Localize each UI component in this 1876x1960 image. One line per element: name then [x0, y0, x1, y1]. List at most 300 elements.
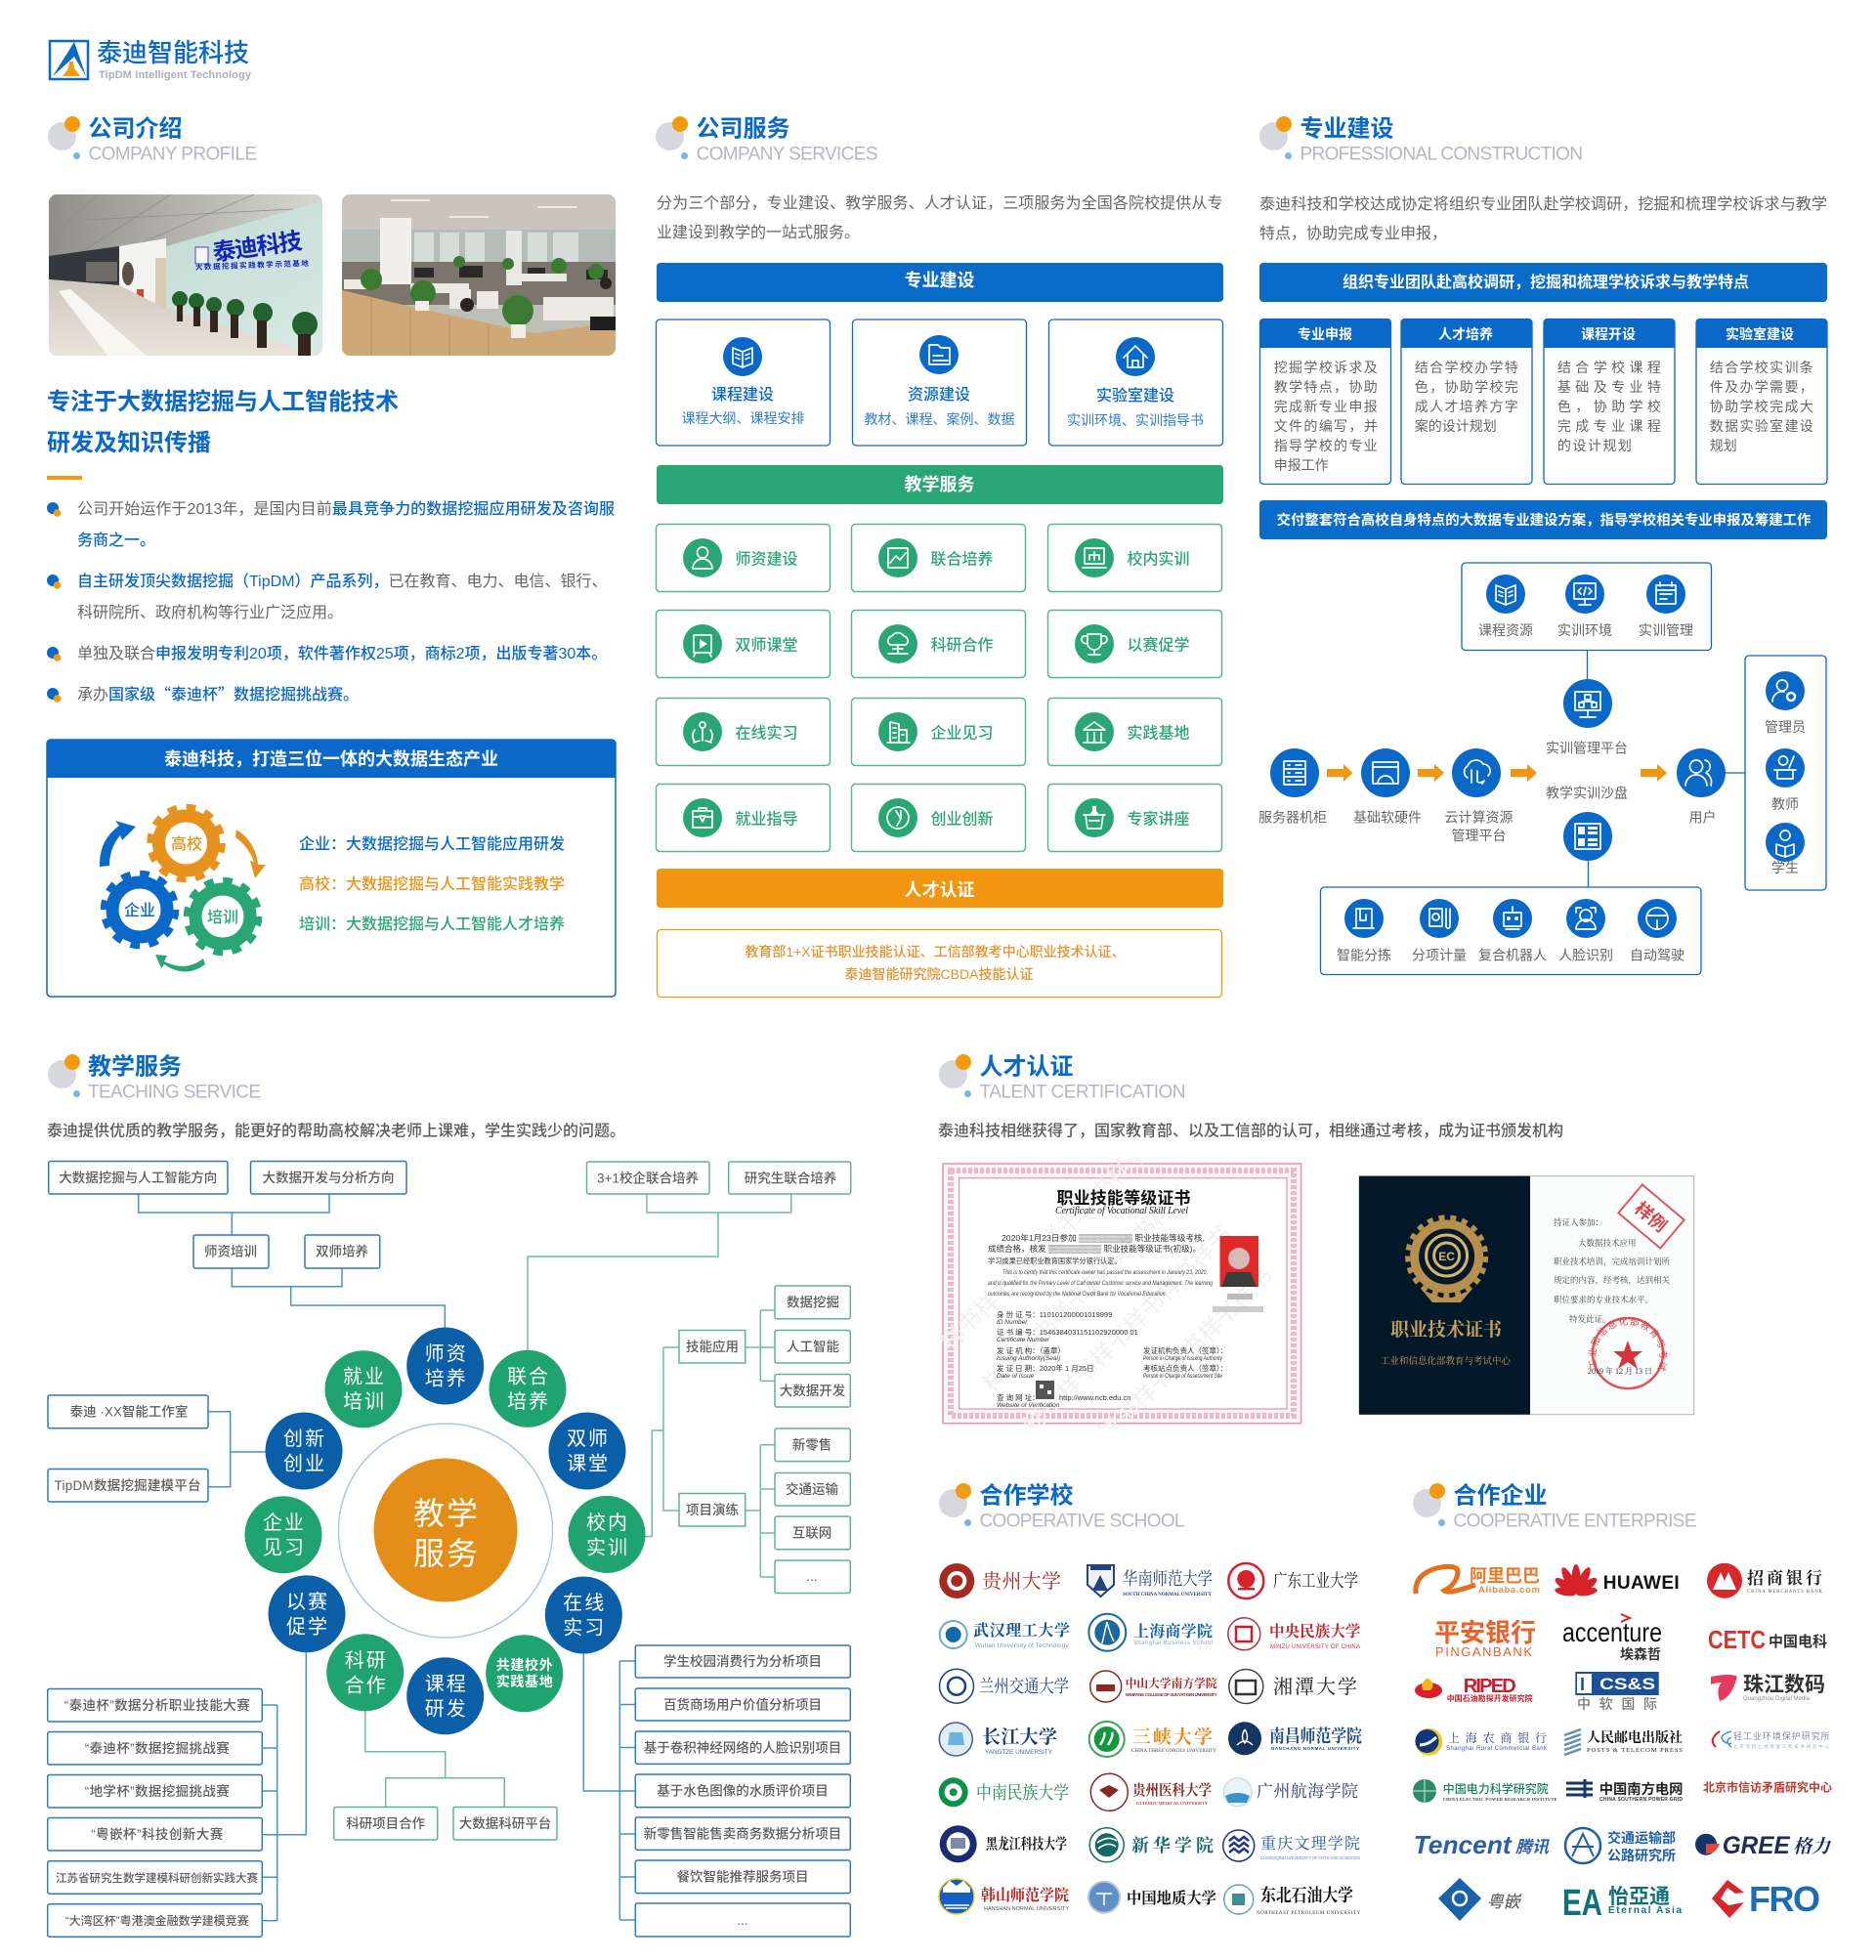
logo: Beijing Petition Research Center: 北京市信访矛盾研究中心	[1703, 1780, 1832, 1794]
card: resource construction: 教材、课程、案例、数据	[864, 411, 1014, 427]
boxes: internship projects: 新零售智能售卖商务数据分析项目	[644, 1825, 841, 1841]
logo: Chongqing University of Arts and Sciences	[1223, 1830, 1360, 1861]
boxes: project practice: 交通运输	[786, 1481, 838, 1497]
boxes: skill application	[679, 1286, 850, 1407]
boxes: innovation platforms: TipDM数据挖掘建模平台	[55, 1477, 201, 1493]
panel: company services	[656, 116, 1223, 998]
box: talent training	[1401, 319, 1532, 485]
certificate: vocational skill: ID Number	[997, 1319, 1028, 1326]
logo: China Merchants Bank	[1707, 1563, 1823, 1598]
logo: Guizhou Medical University: GUIZHOU MEDICAL UNIVERSITY	[1136, 1801, 1209, 1806]
logo: Shanghai Rural Commercial Bank: 上海农商银行	[1448, 1730, 1547, 1745]
logo: Nanfang College of Sun Yat-sen University: 中山大学南方学院	[1126, 1676, 1217, 1690]
gear: university	[150, 807, 222, 879]
logo: Xiangtan University	[1229, 1669, 1357, 1704]
node: course development: 课程	[425, 1673, 466, 1695]
node: teacher training	[406, 1327, 484, 1405]
node: dual teacher classroom: 课堂	[567, 1452, 608, 1475]
hub: teaching service: 教学	[413, 1496, 478, 1531]
logo: Minzu University of China	[1228, 1618, 1360, 1650]
logo: Shanghai Rural Commercial Bank	[1415, 1728, 1548, 1756]
logo: China Electric Power Research Institute	[1413, 1779, 1557, 1803]
box: course offering: 色，协助学校	[1557, 399, 1661, 414]
logo: FRO	[1712, 1879, 1820, 1919]
logo: Highway Research Institute: 公路研究所	[1607, 1848, 1676, 1863]
boxes: joint training: 研究生联合培养	[745, 1171, 837, 1186]
stamp: seal: 2019 年 12 月 13 日	[1588, 1366, 1652, 1376]
logo: China Southern Power Grid	[1566, 1779, 1683, 1803]
boxes: project practice: 新零售	[792, 1436, 831, 1452]
box: applications: 人脸识别	[1558, 947, 1613, 962]
heading: cooperative enterprise	[1413, 1483, 1696, 1532]
icon: users	[1677, 748, 1726, 797]
box: laboratory construction: 件及办学需要，	[1710, 379, 1813, 395]
node: innovation: 创业	[283, 1452, 324, 1475]
box: laboratory construction: 规划	[1710, 438, 1737, 453]
card: laboratory construction: 实验室建设	[1096, 386, 1174, 405]
box: talent training: 案的设计规划	[1415, 418, 1497, 434]
gear: university: 高校	[171, 834, 202, 853]
node: teacher training: 培养	[425, 1368, 466, 1389]
logo: Accenture: accenture	[1562, 1617, 1662, 1647]
logo: China Merchants Bank: 招商银行	[1747, 1568, 1822, 1588]
certificate: technical certificate: 职位要求的专业技术水平。	[1554, 1295, 1653, 1304]
heading: talent certification: 人才认证	[979, 1054, 1073, 1081]
node: competition	[268, 1575, 346, 1652]
heading: cooperative enterprise: COOPERATIVE ENTERPRISE	[1454, 1511, 1696, 1532]
connectors	[139, 1194, 791, 1921]
service: joint training: 联合培养	[930, 551, 994, 569]
certificate: vocational skill: Date of Issue	[997, 1373, 1035, 1380]
legend text: 高校：大数据挖掘与人工智能实践教学	[299, 874, 565, 893]
boxes: internship projects: 基于水色图像的水质评价项目	[657, 1782, 829, 1798]
logo: Guangzhou Digital Media: 珠江数码	[1743, 1674, 1825, 1696]
logo: Gree	[1695, 1832, 1832, 1859]
boxes: competitions: “地学杯”数据挖掘挑战赛	[85, 1783, 230, 1799]
photo: reception corridor: 泰迪科技	[211, 228, 304, 267]
bar: talent certification	[657, 869, 1223, 908]
label: basic hardware and software: 基础软硬件	[1353, 810, 1422, 826]
service: online internship	[657, 698, 831, 766]
logo: Shanghai Rural Commercial Bank: Shanghai Rural Commercial Bank	[1446, 1746, 1548, 1752]
service: enterprise visit: 企业见习	[930, 723, 994, 743]
heading: company services: COMPANY SERVICES	[696, 145, 877, 164]
logo: Ping An Bank: PINGANBANK	[1435, 1644, 1532, 1659]
boxes: internship projects: ...	[737, 1913, 748, 1928]
logo: Eternal Asia	[1562, 1883, 1682, 1924]
logo: Nanchang Normal University: NANCHANG NORMAL UNIVERSITY	[1271, 1746, 1359, 1751]
box: course offering: 结合学校课程	[1557, 360, 1661, 375]
boxes: research: 大数据科研平台	[459, 1815, 551, 1831]
panel: cooperative enterprises	[1413, 1483, 1832, 1924]
box: user roles: 教师	[1771, 796, 1799, 812]
logo: Wuhan University of Technology: 武汉理工大学	[973, 1622, 1070, 1640]
heading: company services	[656, 116, 877, 164]
panel: three in one ecosystem: 泰迪科技，打造三位一体的大数据生态产业	[164, 748, 498, 769]
bar: deliver plan: 交付整套符合高校自身特点的大数据专业建设方案，指导学校相关专业申报及筹建工作	[1277, 511, 1811, 529]
label: server cabinet: 服务器机柜	[1258, 810, 1327, 826]
node: competition: 以赛	[286, 1591, 327, 1613]
heading: teaching service	[48, 1054, 261, 1102]
logo: South-Central Minzu University	[939, 1777, 1069, 1807]
logo: Guizhou Medical University	[1090, 1773, 1212, 1811]
certificate: vocational skill: Certificate of Vocational Skill Level	[1055, 1206, 1188, 1216]
bar: organize team: 组织专业团队赴高校调研，挖掘和梳理学校诉求与教学特点	[1343, 273, 1749, 291]
certificate: vocational skill: and is qualified for the Primary Level of Call center Customer service and Management. The learning	[988, 1280, 1213, 1287]
logo: Nanchang Normal University: 南昌师范学院	[1269, 1726, 1362, 1746]
logo: Guangzhou Digital Media: Guangzhou Digital Media	[1743, 1696, 1811, 1702]
service: dual teacher classroom	[657, 610, 831, 678]
card: course construction: 课程建设	[711, 386, 774, 404]
service: online internship: 在线实习	[735, 723, 798, 743]
logo: China Electric Power Research Institute: CHINA ELECTRIC POWER RESEARCH INSTITUTE	[1443, 1797, 1557, 1802]
certification box: 教育部1+X证书职业技能认证、工信部教考中心职业技术认证、	[745, 944, 1126, 959]
tagline: 专注于大数据挖掘与人工智能技术	[47, 389, 399, 415]
logo: Alibaba: 阿里巴巴	[1470, 1566, 1540, 1586]
card: resource construction: 资源建设	[908, 386, 970, 404]
heading: company profile: COMPANY PROFILE	[88, 145, 257, 164]
box: talent training: 结合学校办学特	[1415, 360, 1518, 375]
boxes: innovation platforms: 泰迪 ·XX智能工作室	[70, 1403, 188, 1419]
node: off-campus base: 共建校外	[496, 1657, 553, 1673]
arrow	[1418, 764, 1444, 782]
logo: Tencent: 腾讯	[1515, 1838, 1550, 1856]
node: enterprise visit: 见习	[263, 1538, 304, 1559]
emblem: gold gear	[1408, 1217, 1486, 1302]
logo: Northeast Petroleum University: 东北石油大学	[1260, 1886, 1353, 1905]
service: employment guidance: 就业指导	[735, 811, 798, 829]
node: online internship: 实习	[563, 1616, 604, 1640]
bullet list: 承办国家级“泰迪杯”数据挖掘挑战赛。	[77, 681, 359, 704]
logo: RIPED: RIPED	[1464, 1676, 1516, 1697]
logo: Light Industry Environmental Protection Institute: 北京北科土地修复工程技术研究中心	[1733, 1743, 1829, 1750]
logo: Guangzhou Digital Media	[1711, 1674, 1825, 1702]
node: dual teacher classroom: 双师	[567, 1427, 608, 1450]
certification box: 泰迪智能研究院CBDA技能认证	[845, 966, 1033, 982]
panel: company profile	[47, 116, 616, 997]
service: campus practical training	[1047, 524, 1221, 592]
box: applications: 智能分拣	[1337, 947, 1391, 962]
logo: South China Normal University: SOUTH CHINA NORMAL UNIVERSITY	[1123, 1593, 1212, 1598]
logo: Chinasoft International	[1575, 1672, 1659, 1712]
logo: Yangtze University: YANGTZE UNIVERSITY	[985, 1749, 1053, 1756]
boxes: internship projects: 餐饮智能推荐服务项目	[676, 1868, 809, 1884]
certificate: vocational skill: 样书样书样书样书样书样书	[1019, 1221, 1237, 1439]
logo: Eternal Asia: EA	[1562, 1883, 1602, 1924]
certificate: technical certificate	[1358, 1175, 1694, 1415]
certificate: vocational skill: Issuing Authority(Seal)	[997, 1355, 1060, 1362]
node: joint training: 联合	[507, 1365, 548, 1387]
photo: reception corridor	[49, 194, 322, 356]
bar: organize team	[1259, 263, 1827, 302]
certificate: technical certificate: 特发此证。	[1569, 1314, 1611, 1324]
logo: Posts and Telecom Press: 人民邮电出版社	[1587, 1729, 1683, 1746]
service: learning through competition: 以赛促学	[1128, 635, 1190, 655]
logo: Huawei: HUAWEI	[1603, 1573, 1680, 1594]
node: employment training	[324, 1350, 403, 1427]
gear: enterprise: 企业	[124, 901, 155, 919]
logo: FRO: FRO	[1749, 1879, 1820, 1919]
card: laboratory construction: 实训环境、实训指导书	[1067, 412, 1204, 428]
service: dual teacher classroom: 双师课堂	[735, 637, 798, 655]
logo: RIPED: 中国石油勘探开发研究院	[1447, 1693, 1533, 1703]
card: laboratory construction	[1049, 320, 1223, 446]
logo: Guizhou Medical University: 贵州医科大学	[1132, 1781, 1212, 1799]
boxes: internship projects: 百货商场用户价值分析项目	[663, 1696, 822, 1712]
node: enterprise visit: 企业	[263, 1512, 304, 1534]
tagline: 研发及知识传播	[47, 430, 211, 456]
icon: teaching sandbox	[1563, 812, 1612, 861]
certificate: vocational skill: 2020年1月23日参加 ▒▒▒▒▒▒▒▒▒ 职业技能等级考核,	[1002, 1233, 1205, 1243]
box: applications: 复合机器人	[1478, 947, 1547, 962]
gear: training	[188, 881, 258, 952]
logo: China Three Gorges University: CHINA THREE GORGES UNIVERSITY	[1131, 1749, 1216, 1754]
stamp: sample	[1618, 1184, 1684, 1249]
hub ring	[338, 1424, 553, 1638]
logo: China Three Gorges University: 三峡大学	[1132, 1726, 1213, 1748]
service: teacher building	[657, 524, 831, 592]
box: user roles: 管理员	[1765, 719, 1806, 735]
logo: Chongqing University of Arts and Sciences: 重庆文理学院	[1260, 1835, 1360, 1853]
logo: Yangtze University	[939, 1723, 1057, 1756]
certificate: vocational skill: Person in Charge of Issuing Authority	[1143, 1355, 1223, 1362]
logo: CETC: CETC	[1708, 1625, 1766, 1654]
certificate: vocational skill: 样书样书样书样书样书样书	[936, 1138, 1154, 1356]
node: enterprise visit	[244, 1496, 322, 1573]
certificate: technical certificate: 大数据技术应用	[1578, 1238, 1637, 1248]
node: research	[326, 1634, 404, 1711]
heading: company profile	[48, 116, 257, 164]
logo: Alibaba: Alibaba.com	[1478, 1585, 1540, 1596]
boxes: skill application: 技能应用	[686, 1339, 739, 1354]
boxes: project practice	[679, 1428, 850, 1593]
boxes: joint training	[586, 1162, 851, 1194]
boxes: joint training: 3+1校企联合培养	[597, 1171, 699, 1186]
heading: professional construction	[1259, 116, 1583, 164]
logo: Nanfang College of Sun Yat-sen University	[1090, 1671, 1217, 1702]
box: training resources: 实训环境	[1557, 622, 1612, 638]
logo: Northeast Petroleum University	[1224, 1885, 1360, 1916]
box: laboratory construction: 结合学校实训条	[1710, 360, 1813, 375]
node: innovation: 创新	[283, 1427, 324, 1450]
boxes: skill application: 数据挖掘	[787, 1294, 839, 1309]
logo: Alibaba	[1416, 1566, 1540, 1596]
heading: teaching service: TEACHING SERVICE	[88, 1083, 261, 1102]
bullet list	[47, 499, 615, 704]
logo: Hanshan Normal University: HANSHAN NORMAL UNIVERSITY	[984, 1906, 1069, 1912]
logo: Shanghai Business School: 上海商学院	[1133, 1622, 1213, 1640]
certificate: vocational skill: http://www.ncb.edu.cn	[1059, 1393, 1130, 1402]
company logo and name: TipDM Intelligent Technology	[99, 69, 252, 81]
panel: professional construction	[1258, 116, 1827, 975]
boxes: competitions: “粤嵌杯”科技创新大赛	[91, 1826, 224, 1842]
node: off-campus base	[486, 1635, 563, 1712]
logo: Posts and Telecom Press	[1564, 1729, 1683, 1755]
card: course construction: 课程大纲、课程安排	[682, 410, 805, 426]
logo: CETC	[1708, 1625, 1827, 1654]
logo: Nanfang College of Sun Yat-sen University: NANFANG COLLEGE OF SUN YAT-SEN UNIVERSITY	[1126, 1692, 1217, 1697]
emblem: gold gear: EC	[1438, 1250, 1455, 1263]
box: laboratory construction: 数据实验室建设	[1710, 418, 1813, 434]
hub: teaching service: 服务	[413, 1536, 478, 1571]
logo: Huawei	[1553, 1564, 1680, 1598]
logo: Posts and Telecom Press: POSTS & TELECOM PRESS	[1587, 1747, 1683, 1754]
certificate: technical certificate: 职业技术证书	[1390, 1319, 1503, 1341]
arrow: green	[155, 955, 205, 971]
direction boxes top left: 大数据挖掘与人工智能方向	[59, 1170, 217, 1185]
certificate: vocational skill: 样书样书样书样书样书样书	[978, 1180, 1196, 1397]
certificate: vocational skill: 证 书 编 号：1546384031151102920000 01	[997, 1327, 1138, 1337]
certificate: vocational skill	[940, 1158, 1301, 1428]
card: course construction	[657, 320, 831, 446]
icon: basic hardware and software	[1361, 748, 1410, 797]
box: laboratory construction: 协助学校完成大	[1710, 399, 1813, 414]
box: training resources: 实训管理	[1639, 622, 1693, 638]
bullet list: 单独及联合申报发明专利20项，软件著作权25项，商标2项，出版专著30本。	[77, 645, 607, 662]
certificate: vocational skill: 发 证 机 构：（盖章）	[997, 1345, 1065, 1355]
gear: training: 培训	[207, 909, 238, 926]
service: expert lecture	[1047, 784, 1221, 852]
bar: teaching service	[657, 465, 1223, 504]
box: course offering: 基础及专业特	[1557, 379, 1661, 395]
logo: China Southern Power Grid: CHINA SOUTHERN POWER GRID	[1599, 1797, 1683, 1803]
boxes: competitions	[48, 1688, 262, 1937]
service: expert lecture: 专家讲座	[1128, 809, 1190, 829]
logo: RIPED	[1415, 1676, 1533, 1703]
box: laboratory construction	[1696, 319, 1827, 485]
node: employment training: 就业	[343, 1366, 384, 1388]
intro text	[1259, 195, 1827, 242]
logo: Northeast Petroleum University: NORTHEAST PETROLEUM UNIVERSITY	[1257, 1911, 1360, 1916]
heading: talent certification	[939, 1054, 1186, 1102]
bullet list: 科研院所、政府机构等行业广泛应用。	[77, 603, 343, 621]
intro text: 分为三个部分，专业建设、教学服务、人才认证，三项服务为全国各院校提供从专	[657, 194, 1223, 212]
box: laboratory construction: 实验室建设	[1726, 326, 1794, 342]
company logo and name: 泰迪智能科技	[97, 38, 249, 67]
logo: Xinhua College: 新华学院	[1131, 1836, 1214, 1855]
label: training platform: 实训管理平台	[1546, 741, 1628, 756]
certificate: vocational skill: Website of Verification	[997, 1402, 1060, 1409]
box: user roles	[1745, 656, 1826, 890]
arrow: blue	[100, 821, 136, 867]
certificate: vocational skill: Person in Charge of Assessment Site	[1143, 1373, 1222, 1380]
label: teaching sandbox: 教学实训沙盘	[1546, 786, 1628, 801]
bullet list: 公司开始运作于2013年，是国内目前最具竞争力的数据挖掘应用研发及咨询服	[77, 499, 615, 518]
panel: teaching service	[47, 1054, 851, 1937]
arrow	[1511, 764, 1537, 782]
panel: cooperative schools	[939, 1483, 1362, 1916]
direction boxes top left: 大数据开发与分析方向	[262, 1170, 395, 1185]
panel: three in one ecosystem	[47, 740, 616, 997]
boxes: project practice: ...	[806, 1569, 818, 1584]
node: teacher training: 师资	[425, 1342, 466, 1365]
boxes: project practice: 互联网	[792, 1526, 831, 1540]
direction boxes top left	[49, 1161, 406, 1268]
logo: South China Normal University: 华南师范大学	[1123, 1568, 1213, 1589]
node: dual teacher classroom	[549, 1413, 625, 1489]
logo: China Southern Power Grid: 中国南方电网	[1599, 1780, 1683, 1798]
logo: Yueqian: 粤嵌	[1487, 1893, 1522, 1911]
logo: South China Normal University	[1087, 1564, 1213, 1598]
service: employment guidance	[657, 784, 831, 852]
stamp: sample: 样例	[1631, 1199, 1671, 1236]
box: applications: 自动驾驶	[1630, 947, 1684, 962]
logo: Lanzhou Jiaotong University	[940, 1669, 1069, 1703]
logo: Guangdong University of Technology	[1228, 1563, 1358, 1598]
legend text: 培训：大数据挖掘与人工智能人才培养	[299, 915, 565, 933]
logo: Chongqing University of Arts and Sciences: CHONGQING UNIVERSITY OF ARTS AND SCIENCES	[1260, 1855, 1360, 1860]
node: joint training: 培养	[507, 1390, 548, 1413]
certificate: technical certificate: 工业和信息化部教育与考试中心	[1381, 1355, 1511, 1367]
certificate: vocational skill: 身 份 证 号：110101200001019999	[997, 1309, 1112, 1319]
logo: Chinasoft International: 中软国际	[1577, 1696, 1657, 1712]
direction boxes top left: 师资培训	[204, 1245, 257, 1258]
certificate: vocational skill: 学习成果已经职业教育国家学分银行认定。	[988, 1257, 1122, 1265]
arrow	[1327, 764, 1352, 782]
node: campus training	[569, 1496, 645, 1573]
logo: Highway Research Institute: 交通运输部	[1607, 1830, 1676, 1846]
logo: Tencent: Tencent	[1414, 1830, 1513, 1859]
heading: cooperative enterprise: 合作企业	[1454, 1483, 1548, 1510]
label: cloud platform	[1444, 810, 1513, 843]
node: employment training: 培训	[343, 1390, 384, 1413]
logo: Xiangtan University: 湘潭大学	[1273, 1676, 1357, 1698]
box: major application: 专业申报	[1298, 326, 1352, 342]
logo: Nanchang Normal University	[1228, 1722, 1362, 1755]
heading: professional construction: 专业建设	[1300, 116, 1393, 143]
logo: China University of Geosciences: 中国地质大学	[1127, 1889, 1216, 1907]
logo: Minzu University of China: MINZU UNIVERSITY OF CHINA	[1270, 1644, 1360, 1650]
icon: training platform	[1563, 679, 1612, 728]
box: applications: 分项计量	[1412, 947, 1467, 962]
logo: Chinasoft International: I	[1580, 1675, 1585, 1694]
box: course offering: 的设计规划	[1557, 438, 1632, 453]
boxes: research: 科研项目合作	[346, 1816, 426, 1831]
logo: Light Industry Environmental Protection Institute: 轻工业环境保护研究所	[1733, 1730, 1830, 1741]
box: talent training: 色，协助学校完	[1415, 379, 1518, 395]
heading: cooperative school	[939, 1483, 1184, 1532]
logo: Accenture: 埃森哲	[1620, 1646, 1661, 1662]
heading: cooperative school: COOPERATIVE SCHOOL	[979, 1511, 1184, 1532]
heading: company profile: 公司介绍	[88, 116, 182, 143]
logo: Ping An Bank: 平安银行	[1434, 1618, 1536, 1647]
logo: South-Central Minzu University: 中南民族大学	[976, 1782, 1069, 1803]
service: practice base	[1047, 698, 1221, 766]
logo: China Electric Power Research Institute: 中国电力科学研究院	[1443, 1781, 1549, 1796]
certificate: technical certificate: 持证人参加：	[1554, 1217, 1603, 1227]
heading: professional construction: PROFESSIONAL CONSTRUCTION	[1300, 145, 1583, 164]
photo: open office	[342, 194, 616, 356]
logo: Heilongjiang University of Science and Technology: 黑龙江科技大学	[986, 1835, 1067, 1853]
node: campus training: 校内	[586, 1512, 627, 1534]
node: online internship: 在线	[563, 1592, 604, 1614]
boxes: competitions: “泰迪杯”数据分析职业技能大赛	[64, 1697, 250, 1713]
logo: Lanzhou Jiaotong University: 兰州交通大学	[979, 1677, 1069, 1696]
boxes: research	[334, 1808, 557, 1840]
box: applications	[1321, 887, 1701, 975]
certificate: vocational skill: 样书样书样书样书样书样书	[1061, 1262, 1278, 1480]
bullet list: 自主研发顶尖数据挖掘（TipDM）产品系列，已在教育、电力、电信、银行、	[77, 572, 608, 590]
intro text	[657, 194, 1223, 241]
certification box	[657, 930, 1221, 997]
node: off-campus base: 实践基地	[496, 1674, 553, 1689]
node: competition: 促学	[286, 1616, 327, 1639]
heading: company services: 公司服务	[696, 116, 789, 143]
box: major application: 申报工作	[1274, 457, 1329, 473]
logo: China University of Geosciences	[1088, 1882, 1216, 1913]
logo: Eternal Asia: 怡亞通	[1608, 1886, 1670, 1908]
certificate: vocational skill: 职业技能等级证书	[1057, 1188, 1190, 1208]
